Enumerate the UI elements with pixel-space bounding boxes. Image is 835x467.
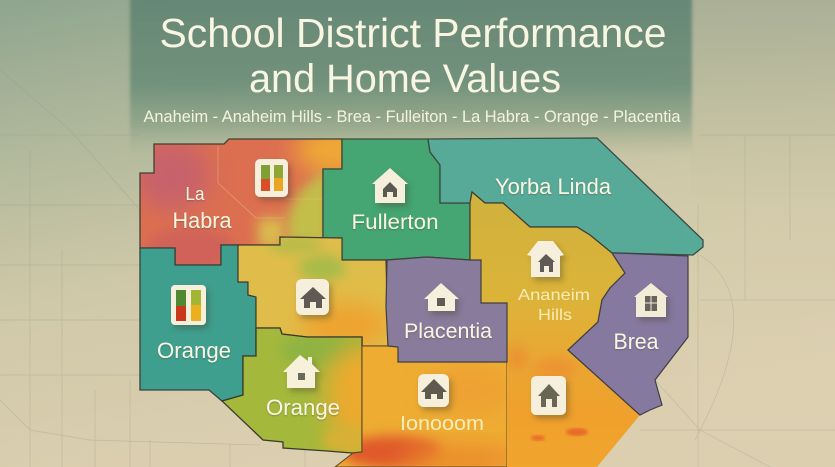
- label: Orange (lower): Orange: [266, 395, 340, 420]
- subtitle: list of cities: Anaheim - Anaheim Hills - Brea - Fulleiton - La Habra - Orange - Placentia: [144, 108, 681, 126]
- label: La Habra: La: [186, 184, 205, 204]
- title: School District Performance: [160, 10, 666, 56]
- icon: Fullerton house: [372, 168, 408, 203]
- title: and Home Values: [249, 57, 561, 101]
- label: Anaheim Hills: Hills: [538, 307, 572, 324]
- label: Yorba Linda: Yorba Linda: [495, 174, 612, 199]
- region: Orange (teal): [140, 245, 256, 401]
- icon: bottom district house: [418, 374, 449, 407]
- label: La Habra: Habra: [172, 208, 232, 233]
- region: central yellow district: [235, 235, 390, 350]
- icon: Placentia house: [424, 283, 459, 311]
- icon: Anaheim Hills house: [527, 241, 564, 277]
- label: Fullerton: Fullerton: [352, 211, 438, 234]
- region: La Habra: [139, 138, 342, 264]
- label: Anaheim Hills: [518, 287, 590, 324]
- icon: Anaheim south house: [531, 376, 566, 415]
- region: Fullerton: [323, 139, 470, 260]
- region: Orange (lower green): [220, 327, 363, 454]
- label: bottom district: Ionooom: [400, 413, 484, 435]
- icon: Orange score card: [171, 285, 206, 325]
- title banner background: [130, 0, 692, 156]
- region: bottom orange district: [334, 346, 507, 467]
- icon: La Habra score card: [255, 159, 288, 197]
- region: Yorba Linda: [428, 138, 703, 255]
- label: Brea: Brea: [614, 329, 659, 354]
- region: Placentia: [386, 257, 507, 362]
- icon: Brea house: [634, 283, 668, 317]
- label: La Habra: [172, 184, 232, 233]
- icon: lower Orange house: [283, 355, 320, 388]
- icon: central district house: [296, 279, 329, 315]
- region: Brea: [568, 253, 688, 415]
- title: [160, 10, 666, 101]
- label: Orange (teal): Orange: [157, 338, 231, 363]
- region: Anaheim Hills: [465, 185, 645, 467]
- label: Anaheim Hills: Ananeim: [518, 287, 590, 304]
- label: Placentia: Placentia: [404, 320, 492, 343]
